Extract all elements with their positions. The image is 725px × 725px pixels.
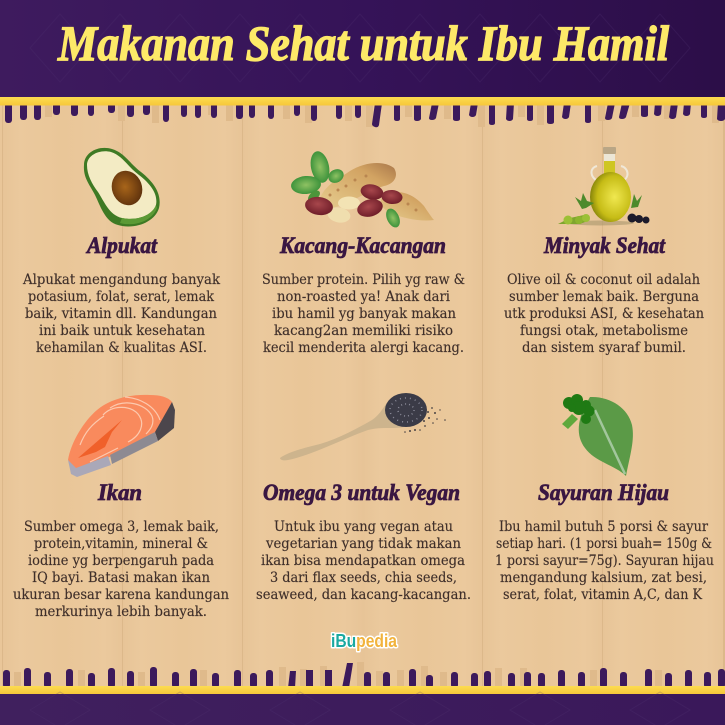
bottom gold stripe xyxy=(0,686,725,694)
text block: Ikan: protein,vitamin, mineral & xyxy=(34,536,208,552)
text block: Ikan xyxy=(13,519,229,620)
icon: peanuts xyxy=(290,149,434,230)
text block: Ikan: ukuran besar karena kandungan xyxy=(13,587,229,603)
tan fringe shadows top xyxy=(45,105,719,127)
text block: Sayuran Hijau xyxy=(495,519,714,603)
text block: Minyak Sehat: dan sistem syaraf bumil. xyxy=(522,340,686,356)
heading: Ikan: Ikan xyxy=(97,480,142,505)
icon: olive oil bottle xyxy=(558,147,650,226)
icon: leaf and broccoli xyxy=(562,394,633,476)
text block: Omega 3: ikan bisa mendapatkan omega xyxy=(261,553,465,569)
bottom purple band xyxy=(0,692,725,725)
icon: spoon with seeds xyxy=(280,393,446,460)
heading: Sayuran Hijau: Sayuran Hijau xyxy=(538,480,669,505)
text block: Kacang-Kacangan xyxy=(262,272,465,356)
text block: Minyak Sehat: utk produksi ASI, & kesehatan xyxy=(504,306,704,322)
purple fringe top xyxy=(5,103,725,127)
text block: Kacang-Kacangan: ibu hamil yg banyak makan xyxy=(272,306,456,322)
heading: Alpukat: Alpukat xyxy=(85,233,158,258)
logo: ibupedia: iBupedia xyxy=(331,631,398,651)
text block: Ikan: iodine yg berpengaruh pada xyxy=(28,553,214,569)
text block: Omega 3: vegetarian yang tidak makan xyxy=(265,536,461,552)
top header band xyxy=(0,0,725,97)
text block: Minyak Sehat: sumber lemak baik. Berguna xyxy=(509,289,699,305)
text block: Alpukat: kehamilan & kualitas ASI. xyxy=(36,340,207,356)
text block: Alpukat: Alpukat mengandung banyak xyxy=(22,272,220,288)
text block: Ikan: Sumber omega 3, lemak baik, xyxy=(24,519,219,535)
tan fringe shadows bottom xyxy=(14,662,662,687)
text block: Minyak Sehat: fungsi otak, metabolisme xyxy=(520,323,688,339)
icon: salmon xyxy=(68,395,175,477)
heading: Kacang-Kacangan: Kacang-Kacangan xyxy=(279,233,446,258)
text block: Sayuran Hijau: serat, folat, vitamin A,C, dan K xyxy=(503,587,702,603)
text block: Ikan: IQ bayi. Batasi makan ikan xyxy=(32,570,210,586)
text block: Omega 3: seaweed, dan kacang-kacangan. xyxy=(256,587,471,603)
text block: Alpukat: potasium, folat, serat, lemak xyxy=(28,289,214,305)
text block: Alpukat: ini baik untuk kesehatan xyxy=(39,323,205,339)
icon: avocado xyxy=(84,148,160,226)
text block: Omega 3: Untuk ibu yang vegan atau xyxy=(274,519,453,535)
text block: Kacang-Kacangan: Sumber protein. Pilih yg raw & xyxy=(262,272,465,288)
text block: Kacang-Kacangan: non-roasted ya! Anak dari xyxy=(277,289,450,305)
text block: Minyak Sehat xyxy=(504,272,704,356)
text block: Sayuran Hijau: mengandung kalsium, zat besi, xyxy=(500,570,707,586)
text block: Alpukat xyxy=(22,272,220,356)
purple fringe bottom xyxy=(3,663,725,688)
text block: Omega 3: 3 dari flax seeds, chia seeds, xyxy=(270,570,457,586)
text block: Ikan: merkurinya lebih banyak. xyxy=(35,604,207,620)
top gold stripe xyxy=(0,97,725,106)
text block: Sayuran Hijau: Ibu hamil butuh 5 porsi & sayur xyxy=(499,519,708,535)
text block: Kacang-Kacangan: kecil menderita alergi kacang. xyxy=(263,340,464,356)
text block: Alpukat: baik, vitamin dll. Kandungan xyxy=(25,306,217,322)
text block: Omega 3 xyxy=(256,519,471,603)
text block: Kacang-Kacangan: kacang2an memiliki risiko xyxy=(274,323,453,339)
heading: Minyak Sehat: Minyak Sehat xyxy=(543,233,666,258)
text block: Minyak Sehat: Olive oil & coconut oil adalah xyxy=(507,272,700,288)
heading: Omega 3 untuk Vegan: Omega 3 untuk Vegan xyxy=(263,480,460,505)
